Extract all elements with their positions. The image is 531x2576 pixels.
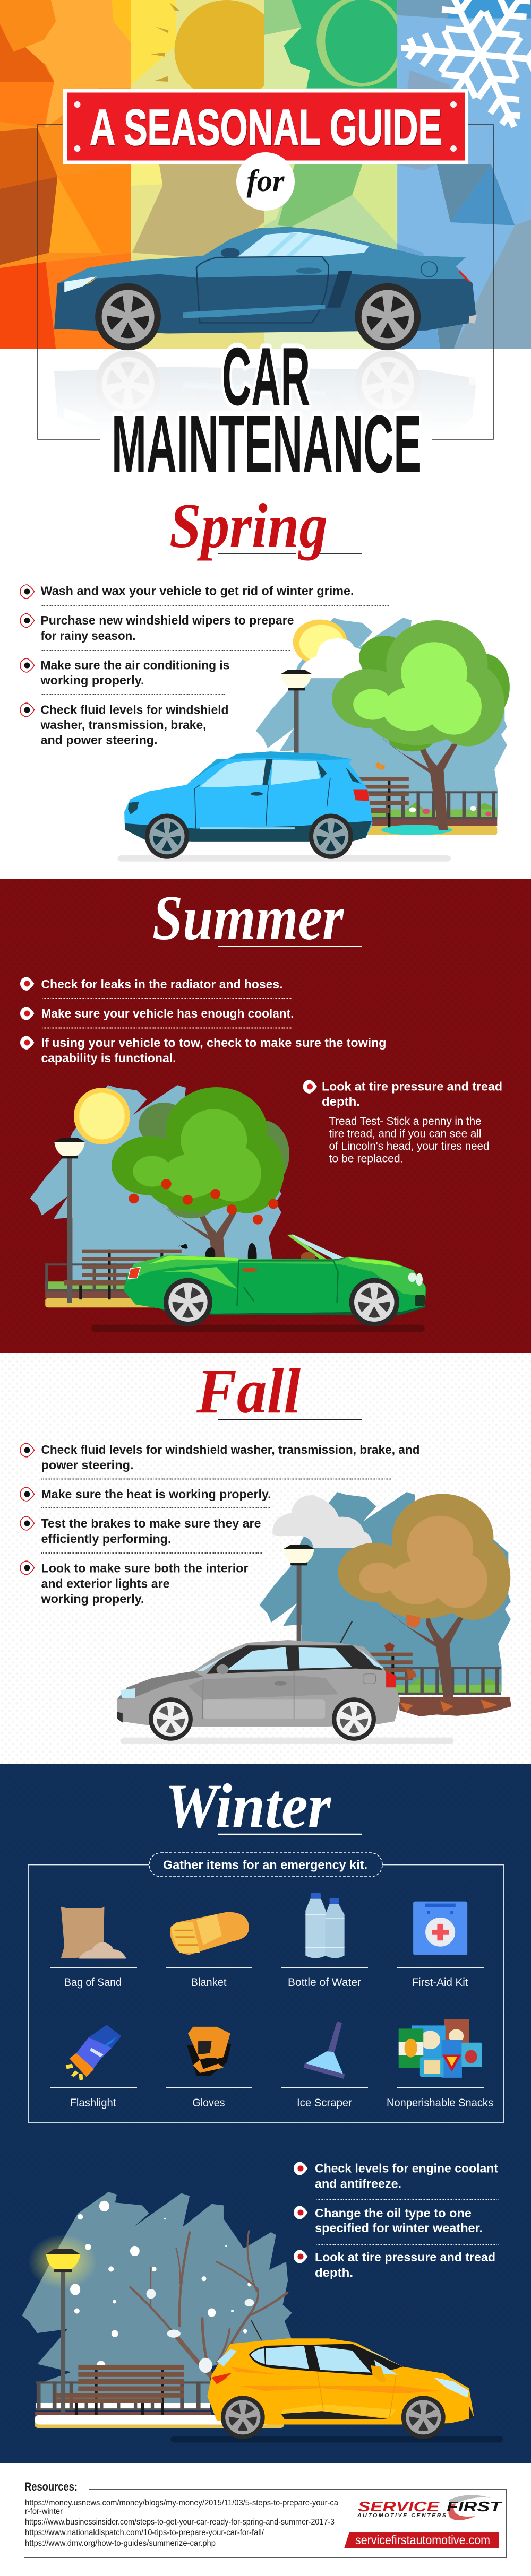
fall checklist: Make sure the heat is working properly. [41,1487,271,1501]
fall checklist: Look to make sure both the interior [41,1561,249,1575]
item: flashlight: Flashlight [70,2097,116,2109]
heading: winter: Winter [165,1771,331,1841]
item: first-aid kit [412,1902,468,1989]
summer checklist: Make sure your vehicle has enough coolant. [41,1007,294,1020]
winter checklist: specified for winter weather. [315,2221,483,2235]
resources list: https://www.nationaldispatch.com/10-tips-to-prepare-your-car-for-fall/ [25,2528,264,2537]
summer checklist: Check for leaks in the radiator and hoses. [41,977,282,991]
spring checklist: working properly. [40,673,144,687]
summer checklist: If using your vehicle to tow, check to make sure the towing [41,1036,387,1050]
icon: yellow hatchback [170,2320,503,2443]
resources list: Resources: [24,2480,78,2493]
icon: blue suv [117,751,451,862]
spring scene [256,618,510,835]
title: car maintenance: CAR [222,331,310,422]
tire tread tip: to be replaced. [329,1152,404,1165]
fall checklist: Test the brakes to make sure they are [41,1516,261,1530]
spring checklist: Wash and wax your vehicle to get rid of winter grime. [40,584,354,597]
seasonal colour bands [0,0,531,349]
fall checklist: and exterior lights are [41,1577,170,1591]
service first logo: FIRST [447,2499,503,2514]
item: bottle of water [288,1893,361,1989]
tire tread tip: depth. [322,1095,360,1108]
fall checklist: power steering. [41,1458,134,1472]
winter checklist: Look at tire pressure and tread [315,2250,495,2264]
resources list: https://money.usnews.com/money/blogs/my-money/2015/11/03/5-steps-to-prepare-your-ca [25,2499,338,2508]
tire tread tip: tire tread, and if you can see all [329,1128,481,1140]
item: blanket [170,1912,249,1989]
tire tread tip: Tread Test- Stick a penny in the [329,1115,481,1127]
resources list: https://www.businessinsider.com/steps-to-get-your-car-ready-for-spring-and-summer-2017-3 [25,2518,335,2527]
icon: green convertible [91,1234,426,1332]
resources list [24,2480,338,2548]
winter checklist [294,2162,499,2279]
summer checklist: capability is functional. [41,1051,176,1065]
service first logo [357,2495,503,2520]
spring checklist [20,584,390,747]
winter checklist: and antifreeze. [315,2176,401,2190]
item: bottle of water: Bottle of Water [288,1976,361,1989]
emergency kit panel [28,1853,503,2123]
service first logo: AUTOMOTIVE CENTERS [357,2512,446,2519]
fall checklist: Check fluid levels for windshield washer, transmission, brake, and [41,1443,419,1456]
item: ice scraper: Ice Scraper [297,2097,352,2109]
spring checklist: and power steering. [40,733,157,747]
item: gloves [187,2027,232,2109]
icon: silver hatchback [117,1621,454,1744]
summer checklist [20,977,387,1065]
spring checklist: Check fluid levels for windshield [40,702,228,716]
panel: winter [0,1764,531,2463]
header [0,0,531,490]
heading: spring: Spring [169,490,328,561]
spring checklist: for rainy season. [40,629,136,643]
kit pill heading: Gather items for an emergency kit. [163,1858,367,1872]
icon: blue sports car [54,227,477,350]
fall checklist [20,1443,419,1606]
car reflection [54,350,476,412]
tire tread tip [303,1079,502,1165]
spring checklist: Make sure the air conditioning is [40,658,229,672]
panel: resources footer [24,2480,506,2558]
spring checklist: washer, transmission, brake, [40,718,206,732]
winter checklist: Check levels for engine coolant [315,2162,498,2175]
tire tread tip: Look at tire pressure and tread [322,1079,502,1093]
item: flashlight [66,2025,121,2109]
fall checklist: working properly. [40,1592,144,1606]
item: ice scraper [297,2022,352,2109]
heading: fall: Fall [196,1356,301,1426]
footer frame [24,2490,506,2558]
summer scene [30,1085,289,1307]
item: bag of sand [61,1907,126,1989]
resources list: https://www.dmv.org/how-to-guides/summerize-car.php [25,2539,216,2548]
item: bag of sand: Bag of Sand [64,1976,122,1989]
panel: spring [20,490,510,862]
panel: fall [0,1353,531,1764]
"for" badge: for [247,163,285,198]
kit pill heading [149,1853,382,1877]
item: first-aid kit: First-Aid Kit [412,1976,468,1989]
spring checklist: Purchase new windshield wipers to prepare [40,613,294,627]
icon: snowflake [399,0,531,135]
title: car maintenance [112,331,422,490]
item: nonperishable snacks: Nonperishable Snacks [387,2097,493,2109]
winter scene [22,2192,293,2428]
website tag: servicefirstautomotive.com [355,2533,490,2547]
item: blanket: Blanket [191,1976,227,1989]
fall checklist: efficiently performing. [41,1532,171,1546]
resources list: r-for-winter [25,2507,63,2516]
title frame [38,125,493,439]
tire tread tip: of Lincoln's head, your tires need [329,1140,490,1152]
heading: summer: Summer [152,882,344,953]
"for" badge [236,152,295,211]
winter checklist: depth. [315,2266,353,2279]
item: gloves: Gloves [192,2097,225,2109]
panel: summer [0,879,531,1353]
fall scene [260,1492,516,1716]
title banner [63,89,468,164]
service first logo: SERVICE [358,2499,440,2514]
item: nonperishable snacks [387,2019,493,2109]
winter checklist: Change the oil type to one [315,2206,472,2220]
